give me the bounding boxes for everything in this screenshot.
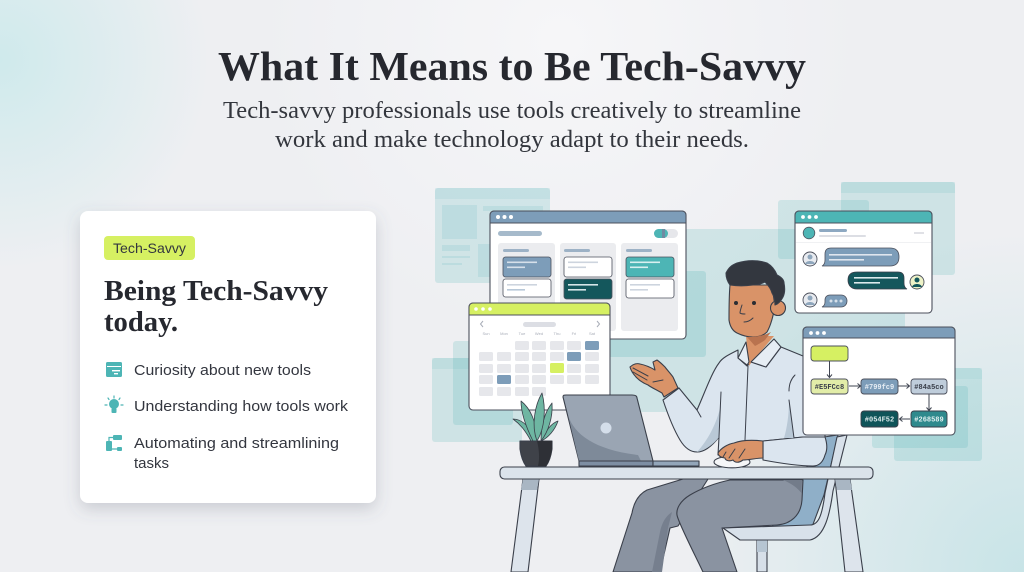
workflow window bbox=[803, 327, 955, 435]
node 054F52: #054F52 bbox=[865, 416, 894, 424]
calendar window: Fri bbox=[572, 331, 576, 336]
tag: Tech-Savvy: Tech-Savvy bbox=[113, 240, 186, 256]
node 84a5co bbox=[911, 379, 947, 394]
node 799fc9: #799fc9 bbox=[865, 384, 894, 392]
head bbox=[726, 261, 786, 346]
chair bbox=[723, 435, 847, 572]
card heading bbox=[104, 276, 328, 338]
background ghost panels bbox=[432, 182, 982, 461]
person at desk illustration bbox=[500, 261, 873, 572]
list item: curiosity: Curiosity about new tools bbox=[134, 362, 311, 379]
calendar window: Sun bbox=[482, 331, 490, 336]
column one bbox=[498, 243, 555, 331]
node 84a5co: #84a5co bbox=[914, 384, 944, 392]
neck bbox=[746, 336, 774, 366]
calendar window: Wed bbox=[535, 331, 543, 336]
card heading: today. bbox=[104, 307, 178, 338]
list item: automating: tasks bbox=[134, 455, 169, 472]
typing message bbox=[803, 293, 847, 307]
card: Being Tech-Savvy today bbox=[80, 211, 376, 503]
left hand bbox=[630, 360, 678, 397]
subtitle: work and make technology adapt to their needs. bbox=[275, 127, 749, 153]
calendar window bbox=[469, 303, 610, 410]
workflow arrows bbox=[827, 361, 932, 422]
column two bbox=[560, 243, 616, 331]
chat window bbox=[795, 211, 932, 313]
node 268589 bbox=[911, 411, 947, 427]
node E5FCc8: #E5FCc8 bbox=[815, 384, 844, 392]
node E5FCc8 bbox=[811, 379, 848, 394]
node 268589: #268589 bbox=[914, 416, 944, 424]
workflow start node bbox=[811, 346, 848, 361]
calendar window: Thu bbox=[554, 331, 560, 336]
laptop bbox=[563, 395, 699, 466]
tag: Tech-Savvy bbox=[104, 236, 195, 260]
kanban window bbox=[490, 211, 686, 339]
subtitle: Tech-savvy professionals use tools creatively to streamline bbox=[223, 98, 801, 124]
calendar window: Mon bbox=[500, 331, 508, 336]
outgoing message bbox=[848, 272, 924, 289]
calendar window: Tue bbox=[519, 331, 526, 336]
table bbox=[500, 467, 873, 572]
list item: automating bbox=[106, 435, 339, 472]
title: What It Means to Be Tech-Savvy bbox=[218, 43, 807, 89]
front leg bbox=[677, 480, 803, 572]
incoming message bbox=[803, 248, 899, 266]
calendar window: Sat bbox=[589, 331, 596, 336]
list item: understanding: Understanding how tools work bbox=[134, 398, 349, 415]
subtitle bbox=[223, 98, 801, 153]
card heading: Being Tech-Savvy bbox=[104, 276, 328, 307]
plant bbox=[513, 393, 558, 466]
list item: automating: Automating and streamlining bbox=[134, 435, 339, 452]
shirt bbox=[663, 347, 825, 455]
column three bbox=[621, 243, 678, 331]
mouse bbox=[714, 456, 750, 468]
collar bbox=[738, 339, 781, 367]
back leg bbox=[613, 479, 708, 572]
node 799fc9 bbox=[861, 379, 898, 394]
node 054F52 bbox=[861, 411, 898, 427]
calendar date grid bbox=[479, 341, 599, 396]
right hand on mouse bbox=[718, 440, 763, 462]
